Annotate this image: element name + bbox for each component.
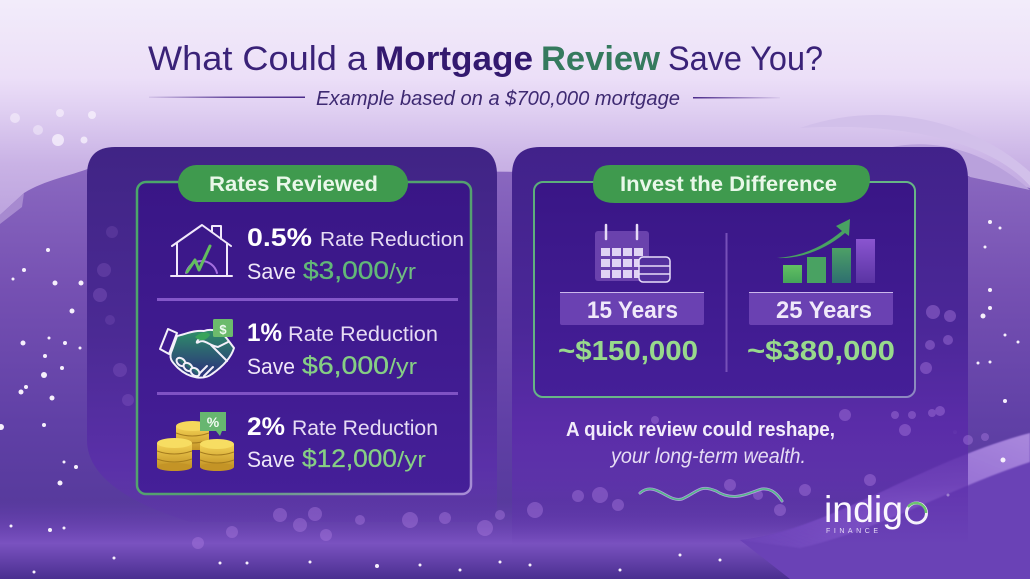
icon: dollar tag: $ xyxy=(219,322,227,337)
icon: handshake xyxy=(160,329,234,378)
tagline xyxy=(566,419,835,468)
outer card xyxy=(512,147,968,545)
row: 1 percent: Rate Reduction xyxy=(288,323,438,346)
row: 2 percent: Save xyxy=(247,447,295,472)
title xyxy=(148,40,823,78)
icon: percent tag xyxy=(200,412,226,436)
icon: calendar with card xyxy=(595,225,670,282)
row: 0.5 percent: Rate Reduction xyxy=(320,229,464,251)
icon: dollar tag xyxy=(213,319,233,337)
title: Review xyxy=(541,40,661,78)
wave accent xyxy=(640,488,782,501)
row: 1 percent: /yr xyxy=(389,354,417,379)
label: 25 years xyxy=(749,292,893,325)
row: 0.5 percent: Save xyxy=(247,259,296,284)
label: 15 years: 15 Years xyxy=(587,297,678,324)
row: 2 percent: 2% xyxy=(247,413,285,441)
logo: indigo finance xyxy=(824,489,926,535)
row: 0.5 percent: $3,000 xyxy=(303,257,389,285)
logo: indigo finance: FINANCE xyxy=(826,528,878,535)
label: 25 years: 25 Years xyxy=(776,297,872,324)
row: 2 percent: Rate Reduction xyxy=(292,417,438,440)
pill: rates reviewed xyxy=(178,165,408,202)
subtitle: Example based on a $700,000 mortgage xyxy=(316,88,680,110)
value: 380,000: ~$380,000 xyxy=(747,335,895,366)
icon: house with rising chart xyxy=(171,225,232,276)
tagline: your long-term wealth. xyxy=(609,445,806,468)
row: 0.5 percent: /yr xyxy=(389,259,416,284)
inner card xyxy=(137,182,471,494)
row: 2 percent xyxy=(247,413,438,473)
row: 0.5 percent: 0.5% xyxy=(247,224,312,252)
row: 2 percent: /yr xyxy=(397,447,426,472)
logo: indigo finance: indig xyxy=(824,489,903,530)
pill: invest the difference xyxy=(593,165,870,203)
label: 15 years xyxy=(560,292,704,325)
title: What Could a xyxy=(148,40,367,78)
row: 1 percent: $6,000 xyxy=(302,352,389,380)
tagline: A quick review could reshape, xyxy=(566,419,835,441)
outer card xyxy=(87,147,497,522)
title: Save You? xyxy=(668,40,823,78)
icon: coin stacks xyxy=(157,421,234,471)
row: 1 percent xyxy=(247,319,438,380)
panel: invest the difference xyxy=(512,147,968,545)
row: 0.5 percent xyxy=(247,224,464,285)
row: 1 percent: Save xyxy=(247,354,295,379)
title: Mortgage xyxy=(375,40,533,78)
value: 150,000: ~$150,000 xyxy=(558,335,698,366)
pill: rates reviewed: Rates Reviewed xyxy=(209,173,378,196)
row: 1 percent: 1% xyxy=(247,319,282,347)
bokeh lights xyxy=(93,226,989,549)
inner card xyxy=(534,182,915,397)
pill: invest the difference: Invest the Difference xyxy=(620,173,837,196)
icon: percent tag: % xyxy=(207,414,220,430)
panel: rates reviewed xyxy=(87,147,497,522)
icon: growth bars with arrow xyxy=(777,219,875,283)
row: 2 percent: $12,000 xyxy=(302,445,397,473)
